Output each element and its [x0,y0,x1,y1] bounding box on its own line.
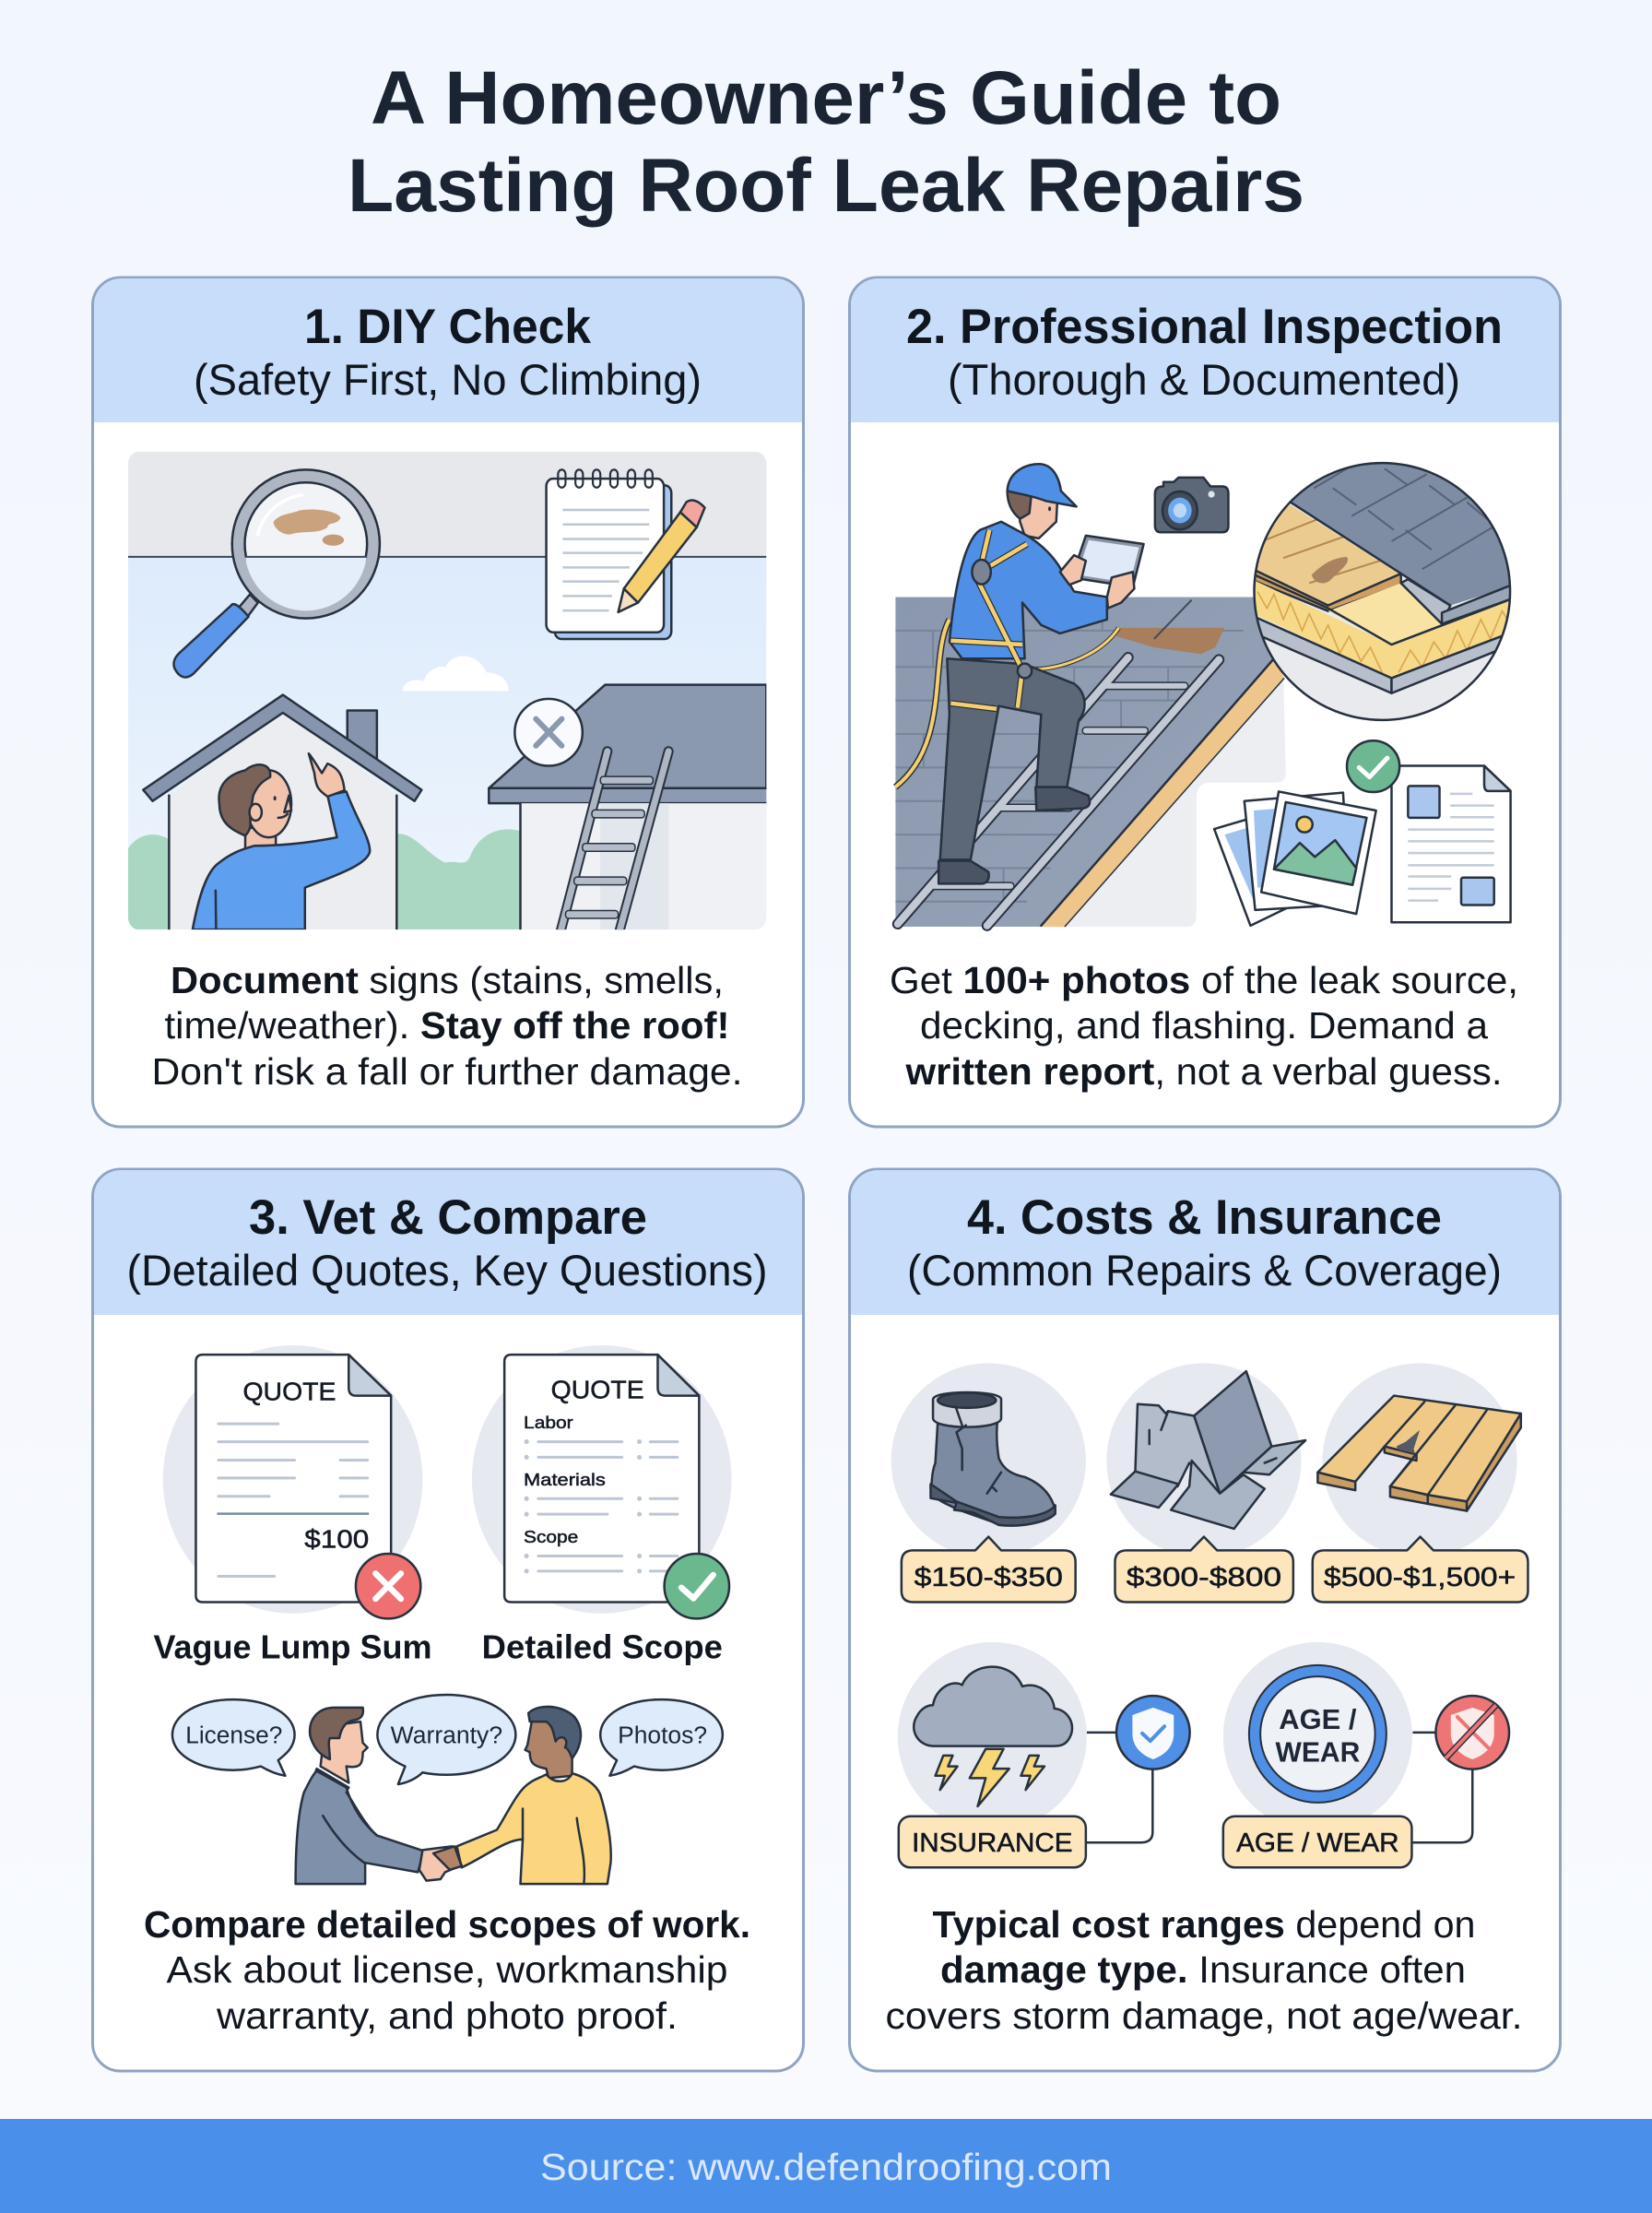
illustration: inspector on roof [895,446,1521,927]
text block: inspection [890,959,1518,1093]
speech bubble: license: License? [185,1723,282,1749]
panel: 1. DIY check [92,278,804,1127]
text block: vetting: warranty, and photo proof. [216,1994,678,2037]
icon: notepad and pencil [547,469,704,639]
age and wear badge [1223,1642,1412,1831]
price tag: flashing [1115,1537,1293,1603]
people shaking hands [296,1707,611,1884]
footer: source [0,2119,1652,2213]
price tag: decking: $500-$1,500+ [1324,1563,1516,1592]
heading: costs and insurance: 4. Costs & Insurance [967,1190,1442,1245]
repair: pipe boot [891,1363,1086,1558]
text block: costs: Typical cost ranges depend on [933,1903,1475,1946]
text block: costs: damage type. Insurance often [940,1948,1466,1991]
heading: DIY check: 1. DIY Check [304,300,592,354]
connector lines [1086,1733,1472,1842]
text block: costs [885,1903,1523,2037]
quote: vague lump sum: $100 [304,1524,369,1553]
panel: 4. costs and insurance [850,1169,1560,2071]
ladder [898,657,1219,926]
text block: vetting [144,1903,750,2037]
text block: DIY check: time/weather). Stay off the roof! [164,1004,730,1047]
quote: detailed scope: Materials [524,1470,606,1489]
repair: damaged flashing [1106,1363,1305,1558]
icon: written report [1391,766,1511,922]
text block: DIY check: Document signs (stains, smells, [171,959,724,1001]
icon: covered shield [1116,1696,1190,1769]
price tag: pipe boot [902,1537,1076,1603]
price tag: decking [1313,1537,1528,1603]
speech bubble: warranty: Warranty? [391,1723,502,1749]
subheading: thorough and documented: (Thorough & Documented) [948,355,1460,404]
storm cloud covered by insurance [898,1642,1087,1831]
tag: age and wear: AGE / WEAR [1236,1828,1399,1858]
speech bubble: photos: Photos? [618,1723,707,1749]
title: A Homeowner’s Guide to [371,56,1281,140]
subheading: common repairs: (Common Repairs & Coverage) [907,1246,1502,1295]
footer: source: Source: www.defendroofing.com [540,2146,1112,2188]
title: Lasting Roof Leak Repairs [348,144,1304,228]
text block: vetting: Compare detailed scopes of work. [144,1903,750,1946]
heading: vet and compare: 3. Vet & Compare [249,1190,647,1245]
icon: approved check [1347,740,1399,792]
age and wear badge: AGE / [1279,1704,1357,1735]
quote: vague lump sum: Vague Lump Sum [154,1628,432,1665]
heading: professional inspection: 2. Professional Inspection [906,300,1503,354]
tag: insurance: INSURANCE [912,1828,1073,1858]
text block: costs: covers storm damage, not age/wear. [885,1994,1523,2037]
quote: vague lump sum: QUOTE [242,1378,336,1406]
subheading: safety first: (Safety First, No Climbing) [194,355,702,404]
panel: 3. vet and compare [92,1169,804,2071]
text block: inspection: written report, not a verbal guess. [904,1050,1503,1093]
inspector [895,464,1144,883]
tag: insurance [899,1817,1086,1867]
text block: DIY check: Don't risk a fall or further damage. [151,1050,743,1093]
panel: 2. professional inspection [850,278,1560,1127]
illustration: repair costs and coverage [891,1363,1528,1867]
detail: cross-section of roof layers [1253,461,1512,721]
illustration: inspection from the ground [128,452,771,932]
icon: magnifying glass on stain [173,469,380,677]
icon: no climbing cross [514,699,583,766]
title [348,56,1304,228]
quote: detailed scope: Scope [524,1527,578,1546]
subheading: detailed quotes: (Detailed Quotes, Key Questions) [127,1246,767,1295]
text block: vetting: Ask about license, workmanship [166,1948,728,1991]
text block: inspection: Get 100+ photos of the leak source, [890,959,1518,1001]
text block: inspection: decking, and flashing. Demand a [920,1004,1488,1047]
quote: detailed scope: QUOTE [551,1376,644,1404]
icon: not covered shield [1435,1696,1509,1769]
quote: vague lump sum [154,1345,432,1665]
price tag: pipe boot: $150-$350 [914,1563,1063,1592]
speech bubble: warranty [377,1695,515,1784]
speech bubble: license [172,1699,295,1776]
icon: photo prints [1214,791,1376,926]
tag: age and wear [1223,1817,1411,1867]
icon: camera [1155,478,1228,532]
quote: detailed scope: Detailed Scope [482,1628,723,1665]
speech bubble: photos [600,1699,723,1776]
quote: detailed scope [472,1345,732,1665]
age and wear badge: WEAR [1275,1737,1360,1769]
text block: DIY check [151,959,743,1093]
illustration: quotes and handshake [154,1345,732,1884]
quote: detailed scope: Labor [524,1413,573,1432]
price tag: flashing: $300-$800 [1127,1563,1281,1592]
repair: rotted decking [1317,1363,1521,1558]
